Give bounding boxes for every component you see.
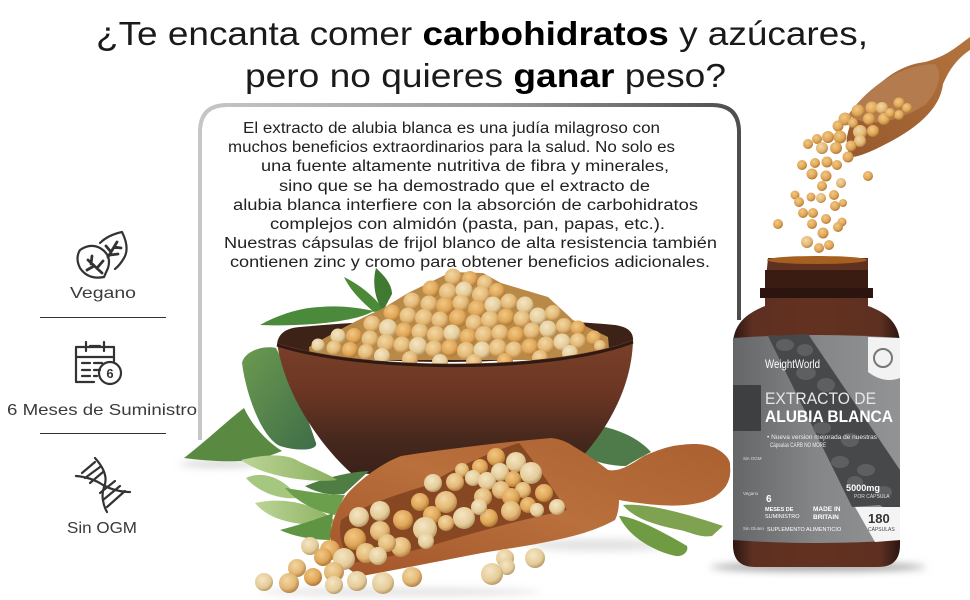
- bottle label: 180: [868, 511, 890, 526]
- icon: calendar: [76, 342, 121, 384]
- description text: El extracto de alubia blanca es una judía milagroso con: [243, 120, 660, 137]
- leaves behind bowl: [184, 268, 651, 466]
- soft ground shadows: [180, 461, 670, 596]
- description text: complejos con almidón (pasta, pan, papas, etc.).: [270, 216, 665, 233]
- title: pero no quieres ganar peso?: [245, 57, 726, 94]
- supplement bottle: [710, 256, 926, 571]
- description text: sino que se ha demostrado que el extracto de: [279, 178, 650, 195]
- bottle label: SUMINISTRO: [765, 514, 800, 520]
- bowl inner back: [277, 319, 633, 362]
- bottle label: POR CÁPSULA: [854, 493, 890, 500]
- bottle label: Sin OGM: [743, 456, 762, 461]
- feature: suministro: 6 Meses de Suministro: [7, 402, 197, 419]
- icon: leaves: [78, 232, 127, 278]
- bottle label: MESES DE: [765, 507, 794, 513]
- bottle label: 5000mg: [846, 483, 880, 493]
- bottle label: EXTRACTO DE: [765, 389, 876, 408]
- description text: [224, 120, 717, 271]
- feature: vegano: Vegano: [70, 285, 136, 302]
- bottle label: Cápsulas CARB NO MORE: [770, 443, 826, 449]
- wooden scoop with beans: [255, 438, 730, 594]
- feature: vegano: [70, 232, 136, 302]
- bottle label: SUPLEMENTO ALIMENTICIO: [767, 527, 842, 533]
- bean bowl: [277, 268, 633, 474]
- bottle label: Vegano: [743, 491, 759, 496]
- icon: calendar: 6: [106, 366, 114, 381]
- description text: muchos beneficios extraordinarios para la salud. No solo es: [228, 139, 675, 156]
- description text: una fuente altamente nutritiva de fibra y minerales,: [261, 158, 669, 175]
- bottle label: 6: [766, 494, 772, 505]
- bottle label: CÁPSULAS: [868, 526, 895, 533]
- bottle label: MADE IN: [813, 506, 841, 513]
- description text: Nuestras cápsulas de frijol blanco de alta resistencia también: [224, 235, 717, 252]
- feature: suministro: [7, 342, 197, 419]
- bowl body: [277, 340, 633, 474]
- title: ¿Te encanta comer carbohidratos y azúcares,: [96, 15, 868, 52]
- bottle label: BRITAIN: [813, 514, 839, 521]
- description text: alubia blanca interfiere con la absorción de carbohidratos: [233, 197, 698, 214]
- icon: DNA: [76, 458, 130, 512]
- description text: contienen zinc y cromo para obtener beneficios adicionales.: [230, 254, 710, 271]
- feature: sin OGM: Sin OGM: [67, 520, 137, 537]
- bottle label: • Nueva version mejorada de nuestras: [767, 435, 877, 441]
- bottle label: ALUBIA BLANCA: [765, 407, 893, 426]
- title: [96, 15, 868, 94]
- pea pods left: [241, 455, 369, 540]
- bottle label: WeightWorld: [765, 357, 820, 371]
- wooden spoon with falling beans: [773, 37, 970, 253]
- rounded text frame: [200, 105, 739, 440]
- pea pods right: [619, 505, 723, 556]
- bottle label: [733, 334, 900, 543]
- bottle label: Sin Gluten: [743, 526, 765, 531]
- beans in bowl: [309, 268, 610, 370]
- feature: sin OGM: [67, 458, 137, 537]
